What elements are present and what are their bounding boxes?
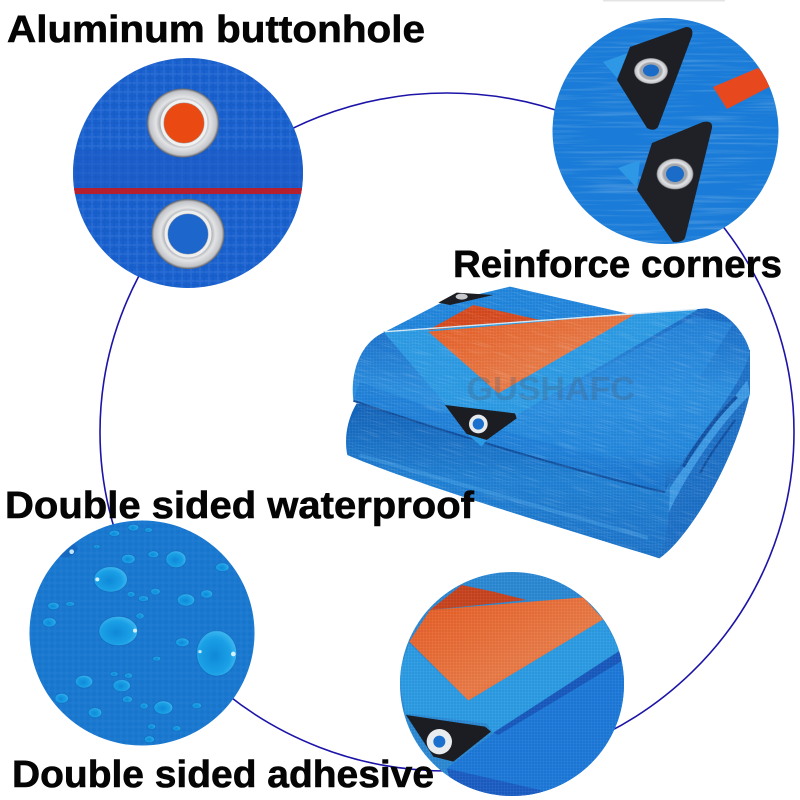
roll shadow line <box>353 401 665 492</box>
upper roll <box>353 308 750 492</box>
grommet with orange centre <box>147 88 219 158</box>
central folded tarp photo <box>346 286 750 558</box>
panel: double sided adhesive photo <box>400 572 624 796</box>
water droplets <box>43 524 237 743</box>
heading: aluminum buttonhole: Aluminum buttonhole <box>7 9 425 51</box>
surface texture <box>346 287 750 558</box>
connecting ring <box>100 93 794 771</box>
top back layer <box>383 287 627 333</box>
top edge strip <box>603 0 725 2</box>
blue flaps <box>603 53 628 78</box>
flap border <box>383 309 698 415</box>
orange patch <box>713 68 775 109</box>
dark orange fold <box>428 305 540 330</box>
panel: double sided waterproof photo <box>26 517 258 749</box>
black top corner <box>438 293 493 305</box>
panel: reinforced corners photo <box>550 15 782 247</box>
dark orange fold <box>430 585 527 610</box>
heading: double sided waterproof: Double sided waterproof <box>5 485 474 527</box>
lower roll <box>346 403 670 558</box>
grommet with blue centre <box>152 199 224 269</box>
right side folds <box>659 347 750 558</box>
heading: double sided adhesive: Double sided adhesive <box>12 754 434 796</box>
black corner patch upper <box>617 27 692 130</box>
black corner with grommet <box>406 715 491 762</box>
heading: reinforce corners: Reinforce corners <box>453 244 782 286</box>
orange centre <box>428 313 637 393</box>
red seam <box>70 188 306 194</box>
watermark: GUSHAFC <box>467 371 635 408</box>
light blue border <box>398 619 620 733</box>
panel: aluminum buttonhole photo <box>70 55 306 291</box>
black front corner with grommet <box>445 405 517 447</box>
lower blue body <box>447 652 630 800</box>
orange centre <box>409 597 603 701</box>
black corner patch lower <box>637 122 712 242</box>
